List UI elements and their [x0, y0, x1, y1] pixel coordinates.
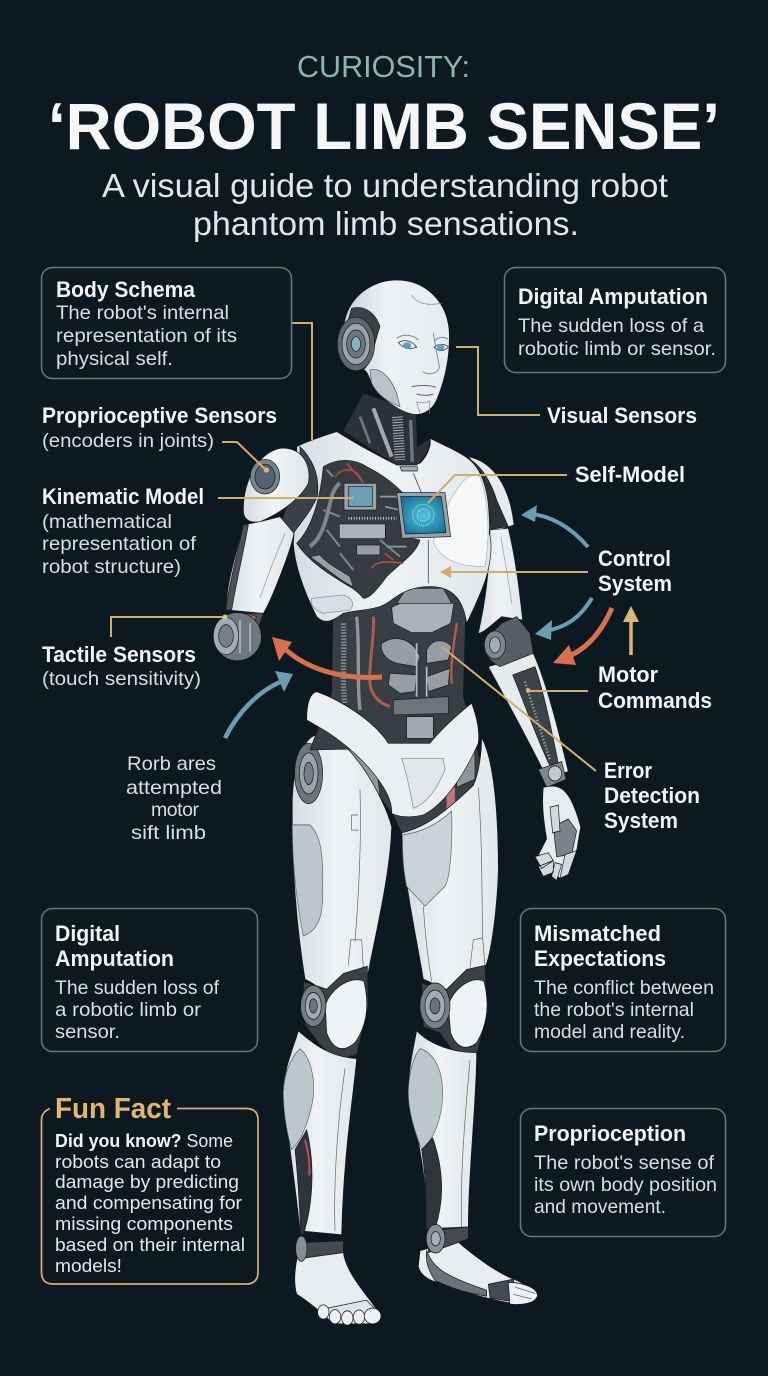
panel: fun fact: Fun Fact: [55, 1093, 171, 1125]
label: kinematic model: [42, 484, 204, 578]
label: kinematic model: (mathematical: [42, 511, 172, 533]
label: tactile sensors: Tactile Sensors: [42, 642, 196, 667]
robot hand: [538, 762, 566, 787]
label: attempted motor note: Rorb ares: [127, 753, 216, 775]
panel: fun fact: missing components: [55, 1213, 233, 1234]
label: self-model: Self-Model: [575, 462, 685, 487]
abdomen mechanics: [310, 583, 478, 750]
robot illustration: [213, 280, 581, 1325]
left thigh: [292, 735, 392, 995]
panel: proprioception: Proprioception: [534, 1121, 686, 1146]
panel: fun fact: [42, 1093, 258, 1284]
panel: proprioception: and movement.: [534, 1196, 666, 1218]
robot torso, pelvis and left arm: [213, 280, 491, 817]
label: visual sensors: Visual Sensors: [547, 403, 697, 428]
chest armor: [293, 432, 491, 623]
hip mechanism: [327, 728, 483, 837]
panel: fun fact: models!: [55, 1255, 122, 1276]
panel: fun fact: based on their internal: [55, 1234, 245, 1255]
right knee: [422, 966, 487, 1057]
label: error detection system: System: [604, 808, 678, 833]
panel: digital amputation lower: sensor.: [55, 1021, 120, 1043]
label: proprioceptive sensors: Proprioceptive Sensors: [42, 403, 277, 428]
arrow: gold up to control system: [623, 606, 639, 655]
label: error detection system: [604, 758, 700, 833]
label: control system: System: [598, 571, 672, 596]
subtitle: A visual guide to understanding robot: [102, 167, 668, 204]
arrow: orange to stump: [272, 637, 382, 677]
label: motor commands: [598, 662, 712, 713]
panel: digital amputation lower: The sudden loss of: [55, 977, 220, 999]
chest opening with circuitry: [297, 460, 420, 598]
panel: body schema: The robot's internal: [56, 302, 229, 324]
label: attempted motor note: [126, 753, 222, 844]
title: [48, 49, 720, 163]
label: tactile sensors: [42, 642, 201, 690]
arrow: blue to forearm: [535, 598, 592, 640]
panel: digital amputation top: The sudden loss of a: [518, 315, 704, 337]
label: proprioceptive sensors: [42, 403, 277, 452]
panel: mismatched expectations: the robot's internal: [534, 999, 694, 1021]
label: motor commands: Commands: [598, 688, 712, 713]
leader lines: [111, 323, 596, 771]
panel: proprioception: The robot's sense of: [534, 1152, 715, 1174]
panel: mismatched expectations: Mismatched: [534, 921, 661, 946]
panel: proprioception: its own body position: [534, 1174, 717, 1196]
panel: fun fact: damage by predicting: [55, 1171, 239, 1192]
label: kinematic model: Kinematic Model: [42, 484, 204, 509]
label: control system: Control: [598, 546, 671, 571]
panel: fun fact: robots can adapt to: [55, 1151, 221, 1172]
title: CURIOSITY:: [297, 49, 470, 84]
title: ‘ROBOT LIMB SENSE’: [48, 89, 720, 163]
panel: mismatched expectations: Expectations: [534, 946, 666, 971]
pelvis: [307, 692, 479, 817]
left shin: [283, 1031, 357, 1235]
robot legs and hand: [283, 728, 581, 1325]
left upper arm: [227, 517, 294, 613]
left shoulder: [280, 447, 318, 533]
panel: digital amputation top: robotic limb or sensor.: [518, 338, 716, 360]
robot right arm (behind torso): [468, 457, 568, 777]
panel: digital amputation lower: Amputation: [55, 946, 174, 971]
small circuit chips: [344, 483, 377, 510]
neck: [343, 393, 430, 465]
label: error detection system: Detection: [604, 783, 700, 808]
label: kinematic model: representation of: [42, 533, 197, 555]
left knee: [303, 966, 368, 1061]
icon: glowing chest screen: [397, 493, 451, 538]
panel: fun fact: and compensating for: [55, 1192, 242, 1213]
panel: body schema: representation of its: [56, 325, 237, 347]
left foot: [295, 1253, 380, 1325]
panel: digital amputation lower: a robotic limb or: [55, 999, 202, 1021]
arrow: blue to shoulder: [521, 505, 588, 547]
label: motor commands: Motor: [598, 662, 658, 687]
panel: digital amputation lower: [42, 908, 258, 1052]
panel: mismatched expectations: [520, 908, 726, 1052]
right foot: [418, 1241, 532, 1304]
label: control system: [598, 546, 672, 596]
panel: body schema: Body Schema: [56, 277, 196, 302]
label: proprioceptive sensors: (encoders in joints): [42, 430, 214, 452]
label: kinematic model: robot structure): [42, 556, 181, 578]
label: attempted motor note: sift limb: [131, 822, 206, 844]
arm stump joint: [233, 613, 263, 628]
arrow: orange from control system: [553, 608, 612, 665]
panel: body schema: [42, 268, 292, 378]
panel: digital amputation top: Digital Amputation: [518, 284, 708, 309]
right shin: [408, 1031, 477, 1229]
label: attempted motor note: motor: [151, 799, 200, 821]
panel: digital amputation lower: Digital: [55, 921, 120, 946]
right thigh: [402, 738, 498, 993]
head: [343, 280, 449, 414]
subtitle: phantom limb sensations.: [193, 205, 579, 242]
panel: body schema: physical self.: [56, 348, 173, 370]
label: error detection system: Error: [604, 758, 652, 783]
panel: fun fact: Did you know? Some: [55, 1130, 233, 1151]
arrow: blue toward missing limb: [225, 671, 293, 738]
panel: digital amputation top: [504, 268, 726, 372]
panel: mismatched expectations: The conflict between: [534, 977, 714, 999]
label: attempted motor note: attempted: [126, 777, 222, 799]
panel: mismatched expectations: model and reality.: [534, 1021, 685, 1043]
subtitle: [102, 167, 668, 242]
label: tactile sensors: (touch sensitivity): [42, 668, 201, 690]
panel: proprioception: [520, 1108, 726, 1236]
